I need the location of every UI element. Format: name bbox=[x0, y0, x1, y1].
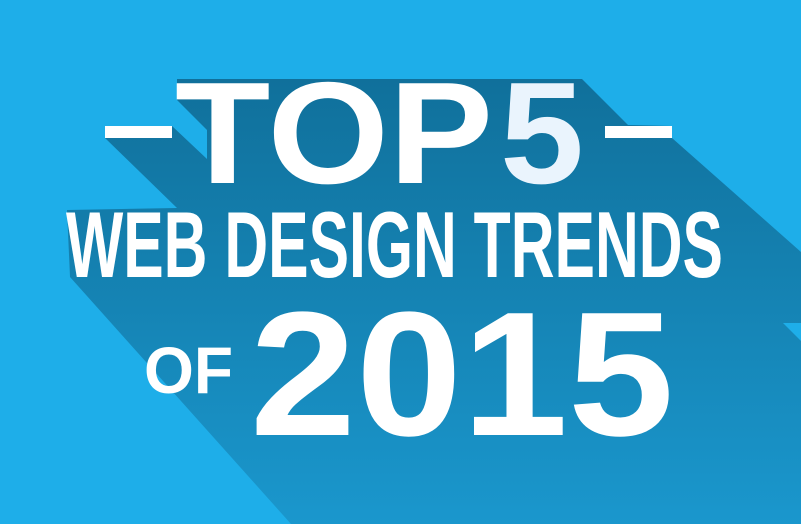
long shadow bbox=[67, 79, 801, 524]
OF: OF bbox=[144, 333, 233, 407]
left dash bbox=[105, 126, 172, 138]
title: TOP 5 bbox=[105, 52, 672, 214]
number 5: 5 bbox=[500, 52, 584, 214]
right dash bbox=[605, 126, 672, 138]
TOP text: TOP bbox=[175, 52, 493, 214]
year 2015: 2015 bbox=[250, 275, 674, 473]
